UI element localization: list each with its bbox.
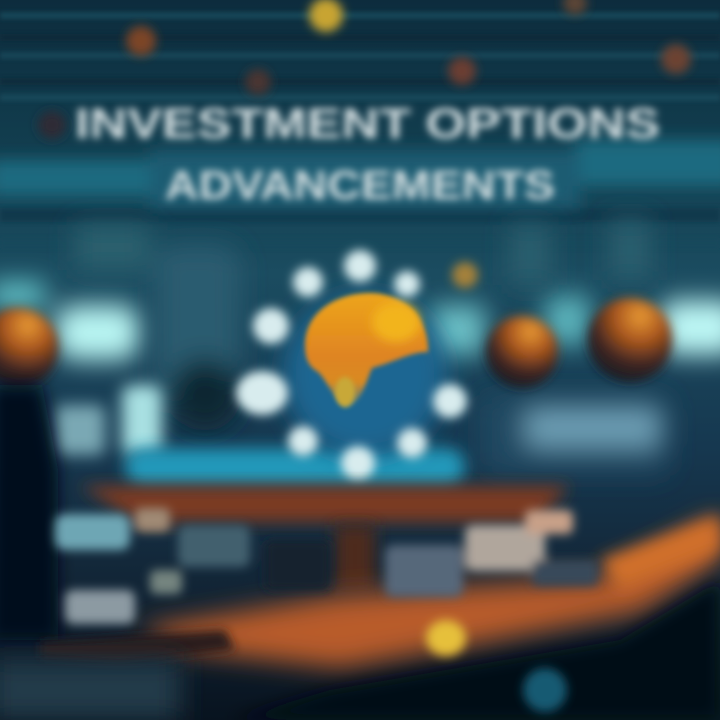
panel: lower left light blocks	[55, 385, 162, 455]
table top rim	[80, 486, 570, 522]
yellow glow	[426, 620, 466, 656]
title	[75, 100, 660, 208]
icon: globe	[283, 293, 447, 457]
title line 2: ADVANCEMENTS	[165, 162, 555, 208]
panel: lower right data block	[480, 395, 670, 475]
teal bands beside the title	[0, 140, 720, 208]
top lights	[38, 0, 691, 139]
icon: right orbs	[486, 298, 672, 388]
table leg	[335, 525, 375, 590]
blue platform	[125, 448, 465, 486]
teal glow	[523, 668, 567, 712]
cyan side windows	[0, 282, 720, 360]
lower right shadow	[230, 580, 720, 720]
desk objects	[55, 508, 598, 624]
title line 1: INVESTMENT OPTIONS	[75, 100, 660, 148]
left dark figure	[0, 385, 58, 640]
icon: left orb	[0, 308, 58, 388]
lower left blocks	[0, 660, 180, 720]
ring of white icons	[236, 250, 478, 480]
lower orange desk	[140, 515, 720, 668]
dark desk base	[40, 630, 235, 664]
top striped shelves	[0, 12, 720, 248]
left dark column behind the globe	[75, 220, 650, 431]
